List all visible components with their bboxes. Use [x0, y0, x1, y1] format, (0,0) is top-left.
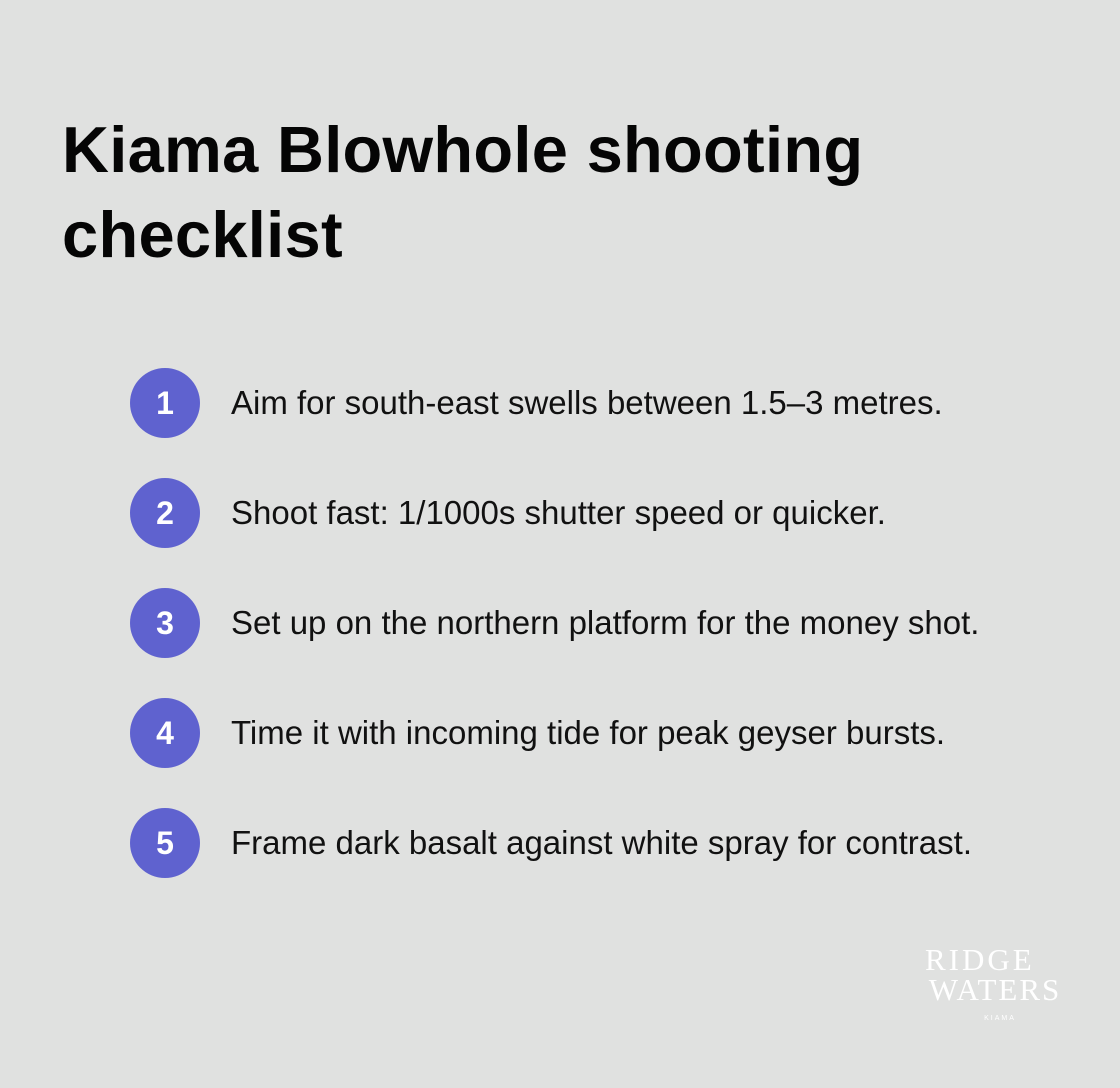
logo: WATERS	[929, 972, 1061, 1007]
item 5: Frame dark basalt against white spray for contrast.	[231, 824, 972, 861]
item 2: 2	[156, 495, 174, 531]
logo	[925, 942, 1061, 1022]
item 3: Set up on the northern platform for the money shot.	[231, 604, 979, 641]
item 1: Aim for south-east swells between 1.5–3 metres.	[231, 384, 943, 421]
item 3: 3	[156, 605, 174, 641]
item 5: 5	[156, 825, 174, 861]
item 5	[130, 808, 972, 878]
item 2	[130, 478, 886, 548]
logo: RIDGE	[925, 942, 1035, 977]
title	[62, 113, 863, 271]
logo: KIAMA	[984, 1015, 1016, 1022]
item 2: Shoot fast: 1/1000s shutter speed or quicker.	[231, 494, 886, 531]
title: checklist	[62, 198, 343, 271]
title: Kiama Blowhole shooting	[62, 113, 863, 186]
item 1	[130, 368, 943, 438]
item 3	[130, 588, 979, 658]
item 4: 4	[156, 715, 174, 751]
item 4	[130, 698, 945, 768]
item 1: 1	[156, 385, 174, 421]
item 4: Time it with incoming tide for peak geyser bursts.	[231, 714, 945, 751]
